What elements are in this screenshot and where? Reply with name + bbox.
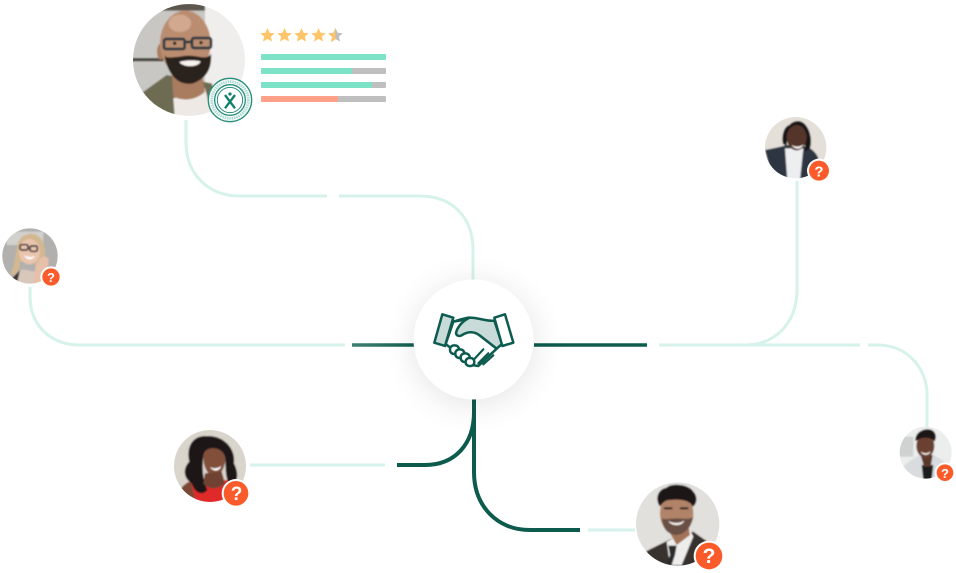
badge: recommended seal	[208, 78, 252, 122]
portrait: woman in red	[174, 430, 248, 506]
connector lines: light segments	[30, 120, 927, 530]
icon: question badge	[807, 159, 831, 183]
question mark: ?	[814, 164, 824, 180]
portrait: blonde woman left	[2, 228, 60, 286]
icon: handshake	[434, 314, 513, 366]
icon: question badge	[40, 266, 62, 288]
portrait: man in suit	[635, 482, 724, 571]
center circle with handshake	[414, 280, 534, 404]
icon: question badge	[694, 541, 724, 571]
icon: question badge	[222, 479, 250, 508]
portrait: woman right in light blazer	[900, 426, 954, 481]
rating bars	[261, 54, 386, 102]
connector lines: dark segments	[352, 345, 647, 530]
portrait: reviewed man with badge	[130, 0, 252, 122]
question mark: ?	[941, 466, 949, 481]
icon: question badge	[935, 462, 955, 483]
question mark: ?	[703, 545, 715, 568]
question mark: ?	[47, 270, 55, 285]
rating stars	[260, 28, 343, 42]
portrait: person top right	[765, 117, 829, 181]
question mark: ?	[231, 484, 242, 505]
